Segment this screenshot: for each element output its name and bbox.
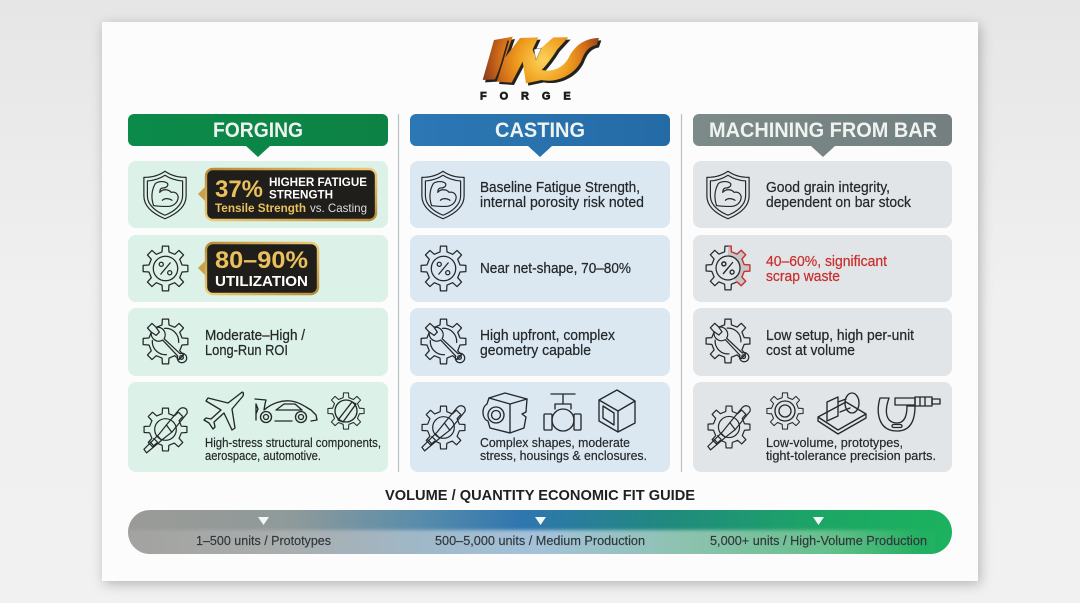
panel: casting bbox=[410, 114, 670, 472]
heading: forging: FORGING bbox=[213, 119, 303, 142]
row: ROI bbox=[693, 308, 952, 376]
volume gradient bar bbox=[128, 510, 952, 554]
row: fatigue strength: dependent on bar stock bbox=[766, 195, 912, 211]
heading: casting bbox=[410, 114, 670, 157]
row: fatigue strength: Good grain integrity, bbox=[766, 180, 890, 196]
icon: airplane bbox=[204, 392, 243, 430]
logo: MTS Forge bbox=[480, 37, 601, 102]
row: applications: stress, housings & enclosures. bbox=[480, 449, 647, 463]
icon: micrometer bbox=[878, 397, 940, 431]
row: ROI: geometry capable bbox=[480, 343, 591, 359]
row: ROI: Moderate–High / bbox=[205, 328, 306, 344]
row: fatigue strength bbox=[128, 161, 388, 228]
panel: forging bbox=[128, 114, 388, 472]
row: applications bbox=[410, 382, 670, 472]
heading: machining: MACHINING FROM BAR bbox=[709, 119, 937, 142]
marker: high-volume bbox=[813, 517, 824, 525]
row: fatigue strength: Tensile Strength bbox=[215, 201, 306, 215]
row: utilization bbox=[128, 235, 388, 302]
row: utilization: scrap waste bbox=[766, 269, 840, 285]
row: fatigue strength: internal porosity risk noted bbox=[480, 195, 644, 211]
column divider lines bbox=[398, 114, 682, 472]
label: medium production: 500–5,000 units / Medium Production bbox=[435, 533, 645, 548]
icon: race car bbox=[255, 399, 317, 422]
row: utilization: Near net-shape, 70–80% bbox=[480, 261, 631, 277]
icon: gear bbox=[767, 393, 803, 429]
row: fatigue strength: 37% bbox=[215, 176, 263, 203]
label: prototypes: 1–500 units / Prototypes bbox=[196, 533, 331, 548]
row: ROI bbox=[410, 308, 670, 376]
icon: square tube bbox=[599, 390, 635, 432]
icon: gear with wrench bbox=[328, 393, 364, 429]
row: applications bbox=[128, 382, 388, 472]
heading: casting: CASTING bbox=[495, 119, 585, 142]
row: fatigue strength bbox=[410, 161, 670, 228]
row: applications: tight-tolerance precision parts. bbox=[766, 449, 936, 463]
title: volume guide: VOLUME / QUANTITY ECONOMIC FIT GUIDE bbox=[385, 487, 695, 504]
row: fatigue strength: HIGHER FATIGUE bbox=[269, 175, 367, 189]
paper sheet bbox=[102, 22, 978, 581]
row: fatigue strength bbox=[693, 161, 952, 228]
row: ROI: Long-Run ROI bbox=[205, 343, 288, 359]
panel: machining from bar bbox=[693, 114, 952, 472]
icon: housing bbox=[483, 393, 527, 433]
row: utilization bbox=[410, 235, 670, 302]
row: fatigue strength: Baseline Fatigue Strength, bbox=[480, 180, 640, 196]
icon: machine on base bbox=[818, 393, 866, 434]
row: ROI: Low setup, high per-unit bbox=[766, 328, 914, 344]
row: ROI bbox=[128, 308, 388, 376]
row: fatigue strength: STRENGTH bbox=[269, 188, 333, 202]
row: applications bbox=[693, 382, 952, 472]
row: utilization bbox=[693, 235, 952, 302]
row: utilization: UTILIZATION bbox=[215, 273, 308, 290]
row: applications: aerospace, automotive. bbox=[205, 449, 321, 463]
row: ROI: High upfront, complex bbox=[480, 328, 616, 344]
icon: valve bbox=[544, 394, 581, 431]
row: applications: High-stress structural components, bbox=[205, 436, 381, 450]
row: utilization: 40–60%, significant bbox=[766, 254, 887, 270]
marker: prototypes bbox=[258, 517, 269, 525]
row: utilization: 80–90% bbox=[215, 247, 308, 274]
logo: MTS Forge: FORGE bbox=[480, 90, 571, 102]
row: fatigue strength: vs. Casting bbox=[310, 201, 367, 215]
marker: medium production bbox=[535, 517, 546, 525]
row: applications: Low-volume, prototypes, bbox=[766, 436, 903, 450]
heading: machining bbox=[693, 114, 952, 157]
heading: forging bbox=[128, 114, 388, 157]
row: applications: Complex shapes, moderate bbox=[480, 436, 630, 450]
row: ROI: cost at volume bbox=[766, 343, 855, 359]
label: high-volume production: 5,000+ units / High-Volume Production bbox=[710, 533, 927, 548]
